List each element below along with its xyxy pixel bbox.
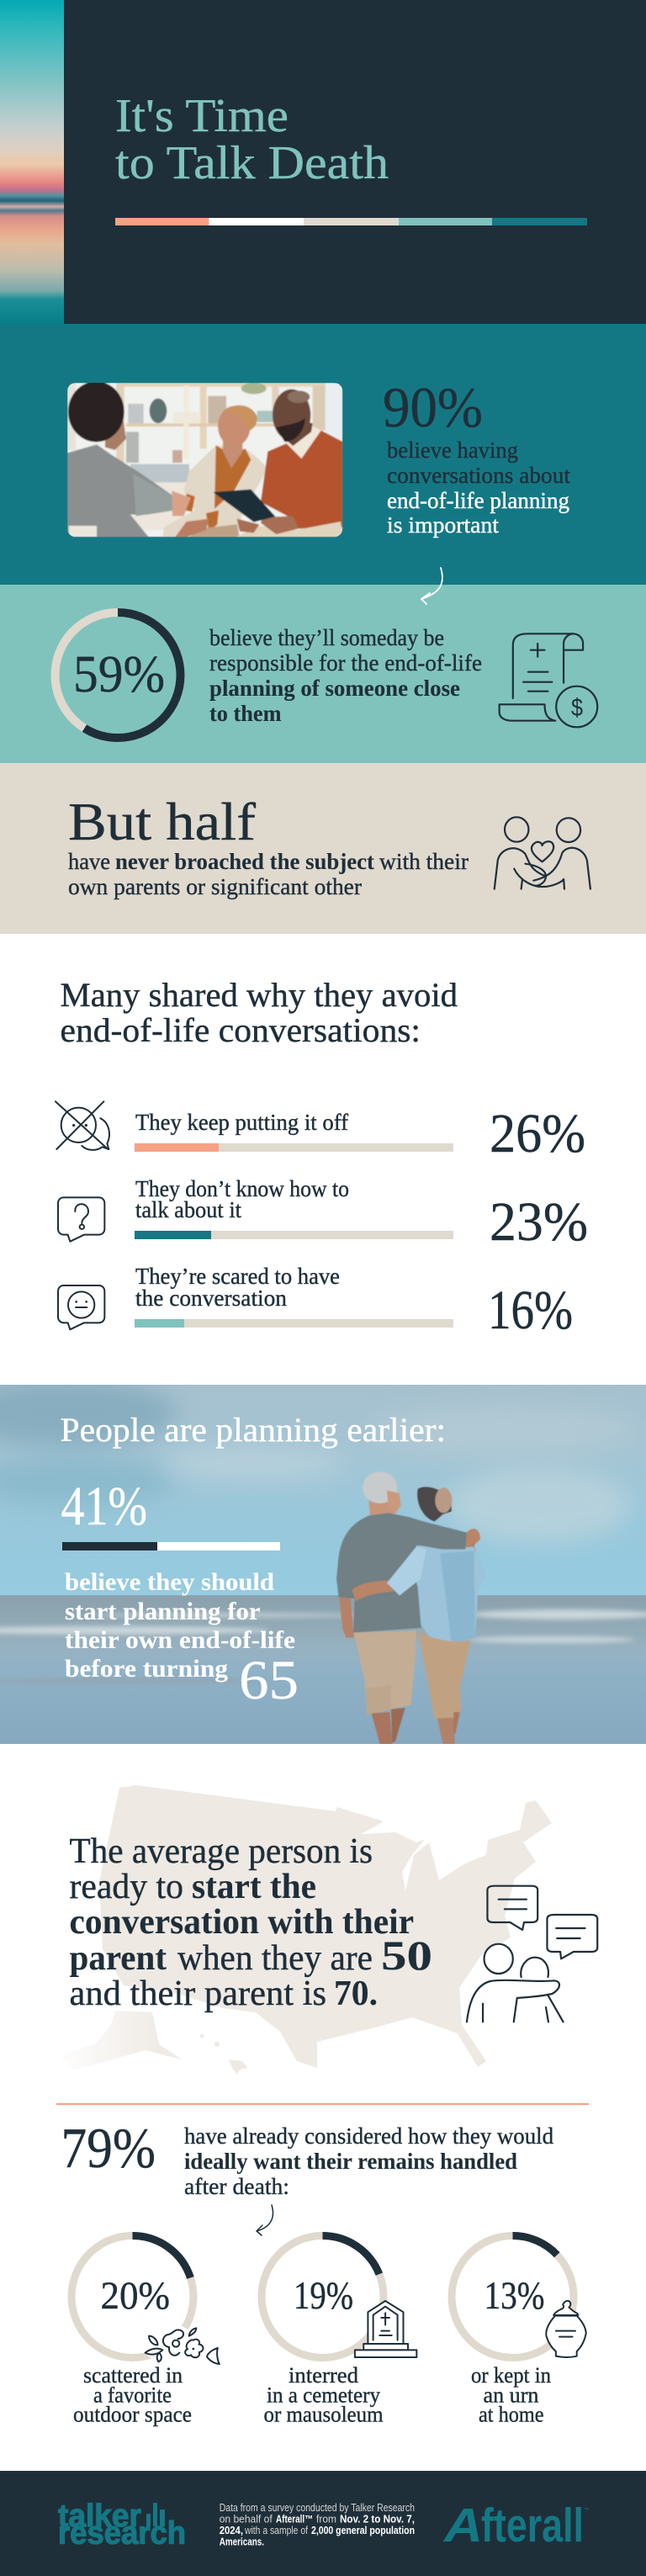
label: scattered: outdoor space	[73, 2403, 192, 2426]
text: 90 percent description: conversations about	[387, 463, 570, 488]
text: remains description: have already considered how they would	[184, 2123, 553, 2149]
arrow	[421, 568, 442, 604]
label: interred	[264, 2363, 384, 2426]
row: don't know how	[58, 1176, 588, 1253]
icon: neutral face speech bubble	[58, 1285, 104, 1329]
text: average person: and their parent is	[69, 1974, 326, 2013]
label: scattered: a favorite	[93, 2383, 172, 2408]
stat: 90%: 90%	[383, 375, 483, 439]
title: It's Time	[115, 90, 289, 142]
text: source note: 2024,	[220, 2525, 243, 2536]
ring chart: 19% interred	[262, 2236, 416, 2357]
panel: but half	[0, 763, 646, 934]
text: 59 percent description: to them	[209, 701, 282, 726]
text: but half description: have	[68, 849, 110, 874]
text: average person: The average person is	[69, 1832, 373, 1871]
label: interred: or mausoleum	[264, 2403, 384, 2426]
text: planning before 65: before turning	[65, 1655, 228, 1683]
colour bar	[115, 218, 587, 225]
icon: will scroll with dollar: $	[571, 694, 583, 722]
label: scattered	[73, 2363, 192, 2426]
text: average person: conversation with their	[69, 1903, 414, 1942]
text: source note: from	[316, 2514, 336, 2526]
stat: 79%: 79%	[61, 2116, 156, 2180]
label: interred: in a cemetery	[267, 2383, 380, 2408]
row: don't know how: talk about it	[135, 1197, 241, 1222]
text: source note: on behalf of	[220, 2514, 273, 2526]
label: urn: or kept in	[471, 2363, 551, 2388]
text: 90 percent description: is important	[387, 512, 500, 538]
row: scared	[58, 1264, 573, 1341]
logo: Afterall	[442, 2499, 589, 2552]
photo: advisor meeting with couple	[67, 381, 342, 537]
icon: people holding heart	[495, 817, 590, 889]
text: 90 percent description	[387, 437, 570, 538]
text: average person	[69, 1832, 432, 2013]
map: united states	[58, 1785, 552, 2075]
heading: People are planning earlier: People are planning earlier:	[61, 1411, 446, 1449]
ring chart: 19% interred: 19%	[294, 2274, 353, 2318]
row: putting it off: They keep putting it off	[135, 1110, 348, 1135]
icon: flowers	[145, 2326, 220, 2364]
text: average person: parent	[69, 1939, 167, 1978]
text: 59 percent description	[209, 625, 482, 726]
text: average person: 70.	[334, 1974, 378, 2013]
text: planning before 65	[65, 1568, 299, 1711]
logo: Afterall: ™	[584, 2507, 589, 2513]
icon: tombstone	[355, 2301, 416, 2357]
row: scared: 16%	[488, 1280, 573, 1341]
bar: 23%	[135, 1231, 453, 1239]
panel: average person map	[58, 1785, 597, 2075]
panel: planning earlier	[0, 1380, 646, 1744]
label: scattered: scattered in	[83, 2363, 183, 2388]
bar: 41%	[62, 1542, 280, 1550]
ring chart: 13% urn: 13%	[484, 2274, 545, 2318]
text: remains description: after death:	[184, 2174, 289, 2199]
text: source note	[220, 2502, 415, 2547]
logo: Afterall: fterall	[481, 2499, 584, 2552]
logo: Afterall: A	[442, 2499, 483, 2552]
bar: 16%	[135, 1319, 453, 1328]
label: urn	[471, 2363, 551, 2426]
logo: talker research: talker	[58, 2499, 141, 2534]
label: urn: at home	[479, 2403, 543, 2426]
row: don't know how: 23%	[490, 1191, 588, 1253]
image: sunset strip	[0, 0, 64, 324]
row: don't know how: They don’t know how to	[135, 1176, 349, 1201]
text: planning before 65: their own end-of-life	[65, 1626, 295, 1654]
title	[115, 90, 389, 189]
text: source note: Americans.	[220, 2536, 264, 2547]
text: 59 percent description: believe they’ll someday be	[209, 625, 444, 650]
stat: 41%: 41%	[61, 1476, 147, 1537]
divider line	[56, 2103, 589, 2105]
text: but half description: with their	[379, 849, 469, 874]
ring chart: 59%	[56, 612, 180, 738]
ring chart: 20% scattered: 20%	[101, 2274, 170, 2318]
text: remains description	[184, 2123, 553, 2199]
bar: 26%	[135, 1143, 453, 1152]
heading: avoid conversations: Many shared why they avoid	[61, 976, 458, 1014]
text: average person: ready to	[69, 1868, 183, 1906]
panel: 90 percent	[0, 324, 646, 585]
label: interred: interred	[289, 2363, 358, 2388]
label: urn: an urn	[483, 2383, 538, 2408]
text: source note: Nov. 2 to Nov. 7,	[340, 2514, 415, 2526]
ring chart: 13% urn	[452, 2236, 586, 2357]
text: planning before 65: start planning for	[65, 1598, 261, 1625]
heading: avoid conversations	[61, 976, 458, 1049]
text: planning before 65: believe they should	[65, 1568, 274, 1596]
icon: urn	[546, 2301, 586, 2357]
logo: talker research: research	[58, 2515, 186, 2551]
row: scared: the conversation	[135, 1285, 287, 1311]
row: putting it off	[56, 1101, 585, 1164]
text: source note: 2,000 general population	[311, 2525, 415, 2536]
text: 90 percent description: end-of-life planning	[387, 488, 569, 513]
logo: talker research	[58, 2499, 186, 2551]
text: but half description: never broached the subject	[115, 849, 374, 874]
text: source note: Data from a survey conducted by Talker Research	[220, 2502, 415, 2514]
heading: But half: But half	[68, 792, 257, 851]
text: but half description	[68, 849, 469, 899]
text: 59 percent description: planning of someone close	[209, 676, 460, 701]
heading: avoid conversations: end-of-life conversations:	[61, 1011, 421, 1049]
panel: 59 percent	[0, 568, 646, 763]
text: planning before 65: 65	[239, 1650, 299, 1711]
text: source note: with a sample of	[244, 2525, 308, 2536]
text: 59 percent description: responsible for the end-of-life	[209, 650, 482, 676]
text: remains description: ideally want their remains handled	[184, 2149, 517, 2174]
text: source note: Afterall™	[276, 2514, 313, 2526]
text: average person: 50	[381, 1932, 432, 1979]
icon: question speech bubble	[58, 1197, 104, 1242]
panel: footer	[0, 2471, 646, 2576]
icon: will scroll with dollar	[500, 633, 597, 727]
panel: remains handled	[61, 2116, 586, 2426]
panel: header	[0, 0, 646, 324]
photo: couple on the beach	[0, 1380, 646, 1744]
text: 90 percent description: believe having	[387, 437, 518, 463]
text: average person: start the	[192, 1868, 316, 1906]
arrow	[257, 2205, 273, 2235]
ring chart: 59%: 59%	[73, 646, 165, 703]
row: scared: They’re scared to have	[135, 1264, 340, 1289]
text: but half description: own parents or significant other	[68, 874, 362, 899]
title: to Talk Death	[115, 137, 389, 189]
ring chart: 20% scattered	[71, 2236, 220, 2364]
panel: why they avoid	[56, 976, 588, 1341]
icon: crossed out speech bubbles	[56, 1101, 109, 1150]
text: average person: when they are	[177, 1939, 373, 1978]
icon: two people talking	[467, 1886, 597, 2022]
row: putting it off: 26%	[490, 1103, 585, 1164]
